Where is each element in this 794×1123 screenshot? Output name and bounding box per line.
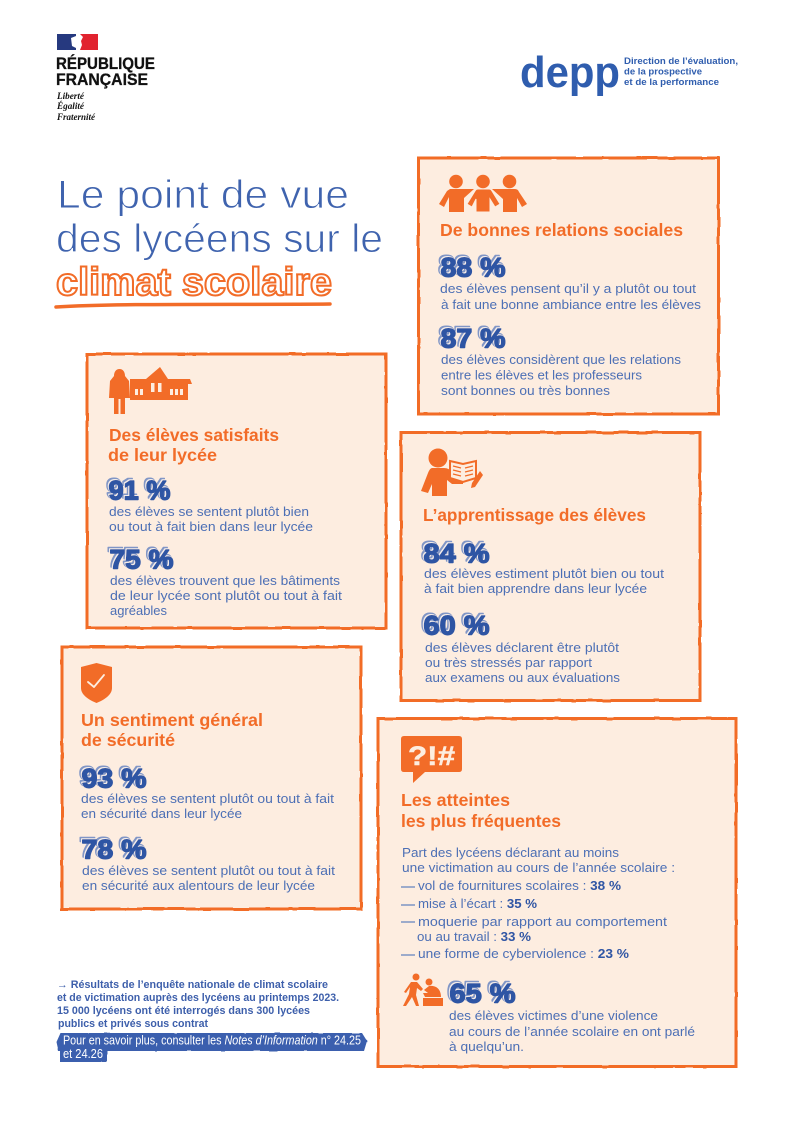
icon: student and school: [109, 367, 192, 414]
stat: 60 %: 60 %: [423, 610, 489, 640]
stat: 87 %: 87 %: [440, 323, 505, 353]
logo: République française: [56, 34, 155, 122]
stat: 78 %: 78 %: [81, 834, 146, 864]
text: sécurité aux alentours: des élèves se sentent plutôt ou tout à fait: [82, 863, 335, 878]
text: intro: une victimation au cours de l’année scolaire :: [402, 860, 675, 875]
callout background: [56, 1033, 367, 1062]
wordmark: FRANÇAISE: [56, 71, 148, 89]
heading: Un sentiment général: [81, 710, 263, 730]
icon: flag: [57, 34, 98, 50]
heading: [401, 790, 561, 831]
text: stress: ou très stressés par rapport: [425, 655, 592, 670]
panel: sécurité: [62, 647, 361, 909]
text: bien dans leur lycée: [109, 504, 313, 534]
list of victimations: mise à l’écart : 35 %: [418, 896, 537, 911]
text: relations: entre les élèves et les professeurs: [441, 368, 642, 382]
text: bâtiments: [110, 573, 342, 618]
title lines: [56, 173, 383, 261]
text: en ont parlé: [449, 1008, 695, 1054]
text: sécurité aux alentours: [82, 863, 335, 893]
callout: en savoir plus: [56, 1033, 367, 1062]
text: relations: des élèves considèrent que les relations: [441, 352, 681, 367]
stat: 65 %: 65 %: [449, 978, 515, 1008]
heading: [81, 710, 263, 750]
text: en ont parlé: à quelqu’un.: [449, 1039, 524, 1054]
motto: Fraternité: [56, 112, 96, 122]
list of victimations: vol de fournitures scolaires : 38 %: [418, 878, 621, 893]
icon: speech bubble: ?!#: [408, 741, 455, 771]
heading: [108, 425, 279, 465]
stat: 84 %: 84 %: [423, 538, 489, 568]
panel: atteintes: [378, 718, 736, 1066]
title lines: Le point de vue: [57, 173, 349, 217]
depp wordmark: depp: [520, 48, 620, 97]
text: ambiance: [440, 281, 701, 312]
text: apprendre: des élèves estiment plutôt bien ou tout: [424, 566, 664, 581]
motto: Liberté: [56, 91, 85, 101]
text: ambiance: à fait une bonne ambiance entre les élèves: [441, 297, 701, 312]
text: sécurité dans le lycée: [81, 791, 334, 821]
list of victimations: ou au travail : 33 %: [417, 929, 531, 944]
icon: shield: [81, 663, 112, 703]
text: relations: sont bonnes ou très bonnes: [441, 383, 610, 398]
icon: two people talking: [403, 974, 443, 1006]
callout text: Pour en savoir plus, consulter les Notes d’Information n° 24.25: [63, 1034, 361, 1048]
text: stress: des élèves déclarent être plutôt: [425, 640, 619, 655]
title: [56, 173, 383, 307]
depp full name: et de la performance: [624, 77, 719, 87]
text: intro: [402, 845, 675, 875]
depp full name: de la prospective: [624, 66, 702, 76]
wordmark: RÉPUBLIQUE: [56, 54, 155, 73]
footnote: survey method: et de victimation auprès des lycéens au printemps 2023.: [57, 992, 339, 1004]
text: stress: [425, 640, 620, 685]
heading: les plus fréquentes: [401, 811, 561, 831]
text: bien dans leur lycée: ou tout à fait bien dans leur lycée: [109, 519, 313, 534]
text: bien dans leur lycée: des élèves se sentent plutôt bien: [109, 504, 309, 519]
panel background: [87, 354, 386, 628]
text: bâtiments: des élèves trouvent que les bâtiments: [110, 573, 340, 588]
logo: depp: [520, 48, 738, 97]
text: stress: aux examens ou aux évaluations: [425, 670, 620, 685]
list of victimations: une forme de cyberviolence : 23 %: [418, 946, 629, 961]
footnote: survey method: [57, 979, 339, 1030]
footnote: survey method: publics et privés sous contrat: [58, 1018, 208, 1030]
motto: [56, 91, 96, 122]
icon: student reading: [421, 448, 483, 496]
text: sécurité aux alentours: en sécurité aux alentours de leur lycée: [82, 878, 315, 893]
panel background: [378, 718, 736, 1066]
text: en ont parlé: des élèves victimes d’une violence: [449, 1008, 658, 1023]
heading: de leur lycée: [108, 445, 217, 465]
text: en ont parlé: au cours de l’année scolaire en ont parlé: [449, 1024, 695, 1039]
depp full name: [624, 56, 738, 87]
text: bâtiments: de leur lycée sont plutôt ou tout à fait: [110, 588, 342, 603]
wordmark: [56, 54, 155, 89]
stat: 93 %: 93 %: [81, 763, 146, 793]
heading: L’apprentissage des élèves: [423, 505, 646, 525]
text: ambiance: des élèves pensent qu’il y a plutôt ou tout: [440, 281, 696, 296]
footnote: survey method: → Résultats de l’enquête nationale de climat scolaire: [57, 979, 328, 991]
panel: bonnes relations sociales: [418, 158, 718, 414]
text: intro: Part des lycéens déclarant au moins: [402, 845, 619, 860]
stat: 75 %: 75 %: [109, 544, 173, 574]
heading: Les atteintes: [401, 790, 510, 810]
stat: 88 %: 88 %: [440, 252, 505, 282]
footnote: survey method: 15 000 lycéens ont été interrogés dans 300 lycées: [57, 1005, 310, 1017]
panel background: [418, 158, 718, 414]
title lines: des lycéens sur le: [56, 217, 383, 261]
heading: Des élèves satisfaits: [109, 425, 279, 445]
motto: Égalité: [56, 101, 85, 111]
panel background: [401, 432, 700, 700]
text: apprendre: à fait bien apprendre dans leur lycée: [424, 581, 647, 596]
list of victimations: [401, 878, 667, 961]
icon: speech bubble: [401, 736, 462, 783]
stat: 91 %: 91 %: [108, 475, 170, 505]
callout text: [63, 1034, 361, 1061]
heading: De bonnes relations sociales: [440, 220, 683, 240]
title underline: [56, 304, 330, 307]
panel background: [62, 647, 361, 909]
text: sécurité dans le lycée: en sécurité dans leur lycée: [81, 806, 242, 821]
text: apprendre: [424, 566, 664, 596]
title highlight: climat scolaire: climat scolaire: [56, 261, 332, 304]
text: bâtiments: agréables: [110, 603, 167, 618]
callout text: et 24.26: [63, 1047, 103, 1061]
panel: élèves satisfaits: [87, 354, 386, 628]
depp full name: Direction de l’évaluation,: [624, 56, 738, 66]
text: sécurité dans le lycée: des élèves se sentent plutôt ou tout à fait: [81, 791, 334, 806]
heading: de sécurité: [81, 730, 175, 750]
icon: three people: [439, 175, 527, 212]
list of victimations: moquerie par rapport au comportement: [418, 914, 667, 929]
panel: apprentissage: [401, 432, 700, 700]
text: relations: [441, 352, 681, 398]
